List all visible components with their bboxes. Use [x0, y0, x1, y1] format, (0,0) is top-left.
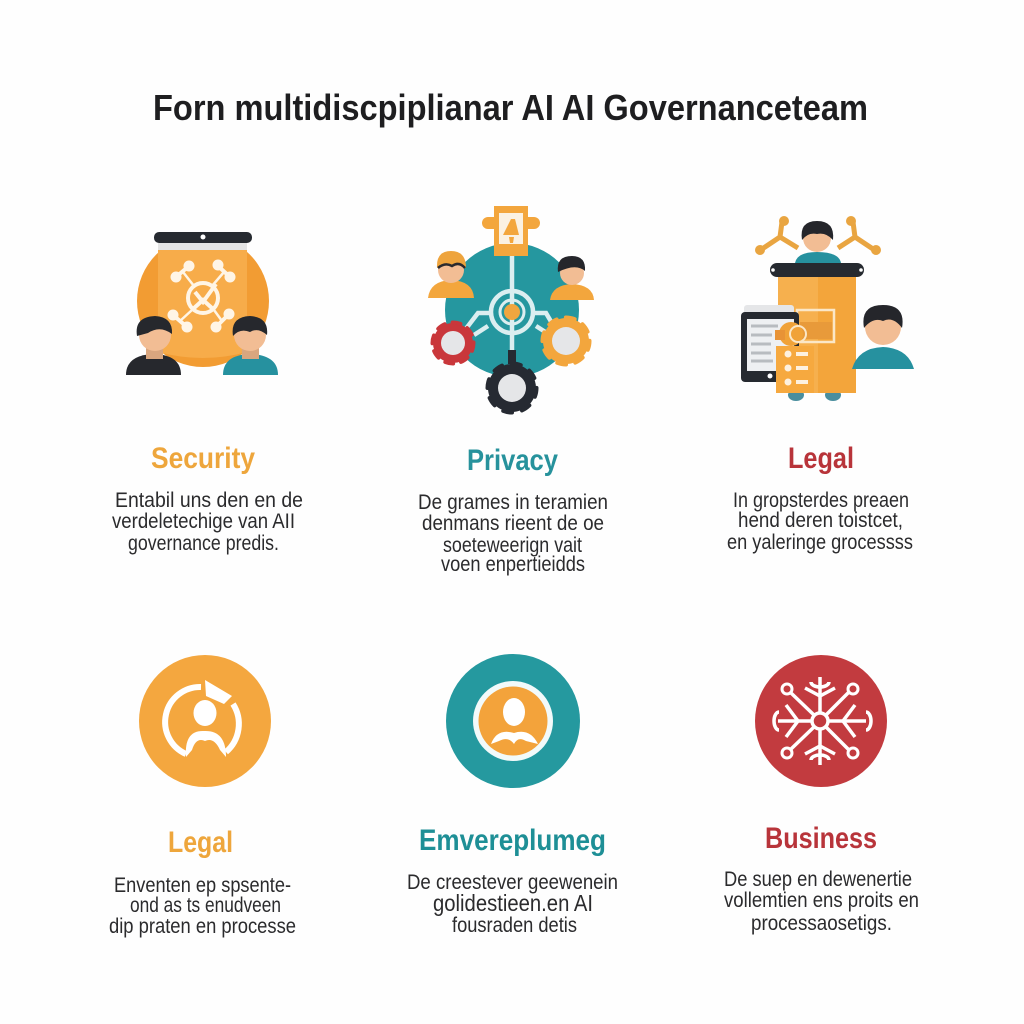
text: privacy description: soeteweerign vait: [443, 534, 582, 557]
text: bottom legal description: dip praten en processe: [109, 915, 296, 938]
heading: Legal (bottom): Legal: [168, 826, 233, 859]
clipboard: [775, 322, 814, 393]
person left: [428, 251, 474, 298]
gear: red: [432, 322, 474, 364]
text: privacy description: denmans rieent de oe: [422, 512, 604, 535]
heading: Business: Business: [765, 822, 877, 855]
text: security description: governance predis.: [128, 532, 279, 555]
text: bottom legal description: Enventen ep spsente-: [114, 874, 291, 897]
text: privacy description: [418, 491, 608, 576]
icon: privacy: [428, 206, 594, 412]
gear: orange: [542, 318, 590, 364]
text: legal description: hend deren toistcet,: [738, 509, 903, 532]
text: privacy description: voen enpertieidds: [441, 553, 585, 576]
icon: legal orange circle: [139, 655, 271, 787]
text: security description: [112, 489, 303, 555]
person left: [126, 316, 181, 375]
person right: [223, 316, 278, 375]
text: legal description: [727, 489, 913, 554]
text: bottom legal description: ond as ts enudveen: [130, 894, 281, 917]
text: business description: processaosetigs.: [751, 912, 892, 935]
icon: person in teal circle: [446, 654, 580, 788]
heading: Legal: Legal: [788, 442, 854, 475]
text: security description: Entabil uns den en de: [115, 489, 303, 512]
person right: [852, 305, 914, 369]
heading: Emvereplumeg: Emvereplumeg: [419, 824, 606, 857]
text: security description: verdeletechige van AII: [112, 510, 295, 533]
icon: legal: [741, 216, 914, 401]
text: legal description: In gropsterdes preaen: [733, 489, 909, 512]
title: Forn multidiscpiplianar AI AI Governanceteam: [153, 87, 868, 128]
text: business description: vollemtien ens proits en: [724, 889, 919, 912]
text: business description: De suep en dewenertie: [724, 868, 912, 891]
heading: Privacy: Privacy: [467, 444, 558, 477]
heading: Security: Security: [151, 442, 255, 475]
text: privacy description: De grames in teramien: [418, 491, 608, 514]
text: emvereplumeg description: fousraden detis: [452, 914, 577, 937]
text: emvereplumeg description: golidestieen.en AI: [433, 890, 593, 916]
text: emvereplumeg description: [407, 871, 618, 937]
text: business description: [724, 868, 919, 935]
text: legal description: en yaleringe grocessss: [727, 531, 913, 554]
icon: network snowflake in red circle: [755, 655, 887, 787]
text: emvereplumeg description: De creestever geewenein: [407, 871, 618, 894]
icon: security: [126, 232, 278, 375]
text: bottom legal description: [109, 874, 296, 938]
tablet: [741, 305, 799, 382]
gear: dark: [488, 350, 536, 412]
person right: [550, 256, 594, 300]
